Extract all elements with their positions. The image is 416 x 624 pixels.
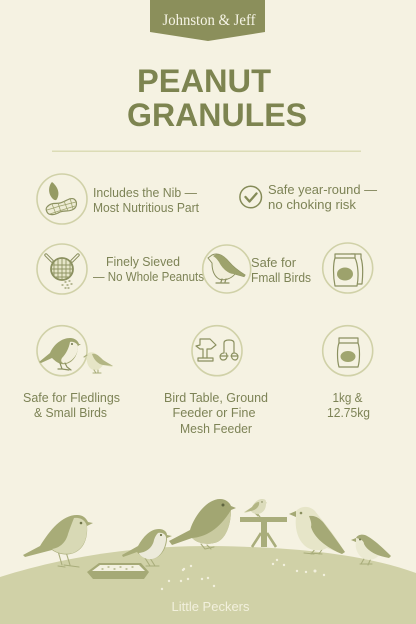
text: pack sizes: 1kg & bbox=[332, 390, 363, 405]
text: feeder types: Feeder or Fine bbox=[172, 405, 256, 420]
text: finely sieved: Finely Sieved bbox=[106, 254, 180, 269]
bird: pale bird facing left bbox=[289, 507, 345, 554]
icon: sieve bbox=[37, 244, 87, 294]
feature: pack sizes bbox=[323, 326, 373, 420]
text: includes the nib: Most Nutritious Part bbox=[93, 200, 199, 215]
title: PEANUT bbox=[137, 63, 271, 99]
seed tray bbox=[87, 563, 149, 579]
bird: robin left bbox=[23, 515, 93, 567]
bird: small bird right bbox=[351, 535, 391, 565]
title: GRANULES bbox=[127, 97, 307, 133]
text: safe for fledglings: Safe for Fledlings bbox=[23, 390, 120, 405]
text: includes the nib: Includes the Nib — bbox=[93, 185, 197, 200]
icon: adult bird and fledgling bbox=[37, 326, 113, 376]
icon: bird bbox=[203, 245, 251, 293]
brand banner bbox=[150, 0, 265, 41]
text: safe for fledglings bbox=[23, 390, 120, 420]
text: safe for small birds bbox=[251, 255, 311, 285]
bird: small finch at tray bbox=[122, 529, 172, 566]
garden scene with birds bbox=[0, 499, 416, 624]
scattered seeds bbox=[161, 559, 325, 590]
brand banner: Johnston & Jeff bbox=[162, 12, 256, 29]
icon: bag bbox=[323, 326, 373, 376]
footer brand text: Little Peckers bbox=[172, 600, 250, 614]
text: feeder types: Bird Table, Ground bbox=[164, 390, 268, 405]
bird table with small bird bbox=[240, 499, 287, 547]
feature: includes the nib bbox=[37, 174, 199, 224]
feature: safe for fledglings bbox=[23, 326, 120, 420]
text: pack sizes bbox=[327, 390, 370, 420]
text: safe year-round: no choking risk bbox=[268, 197, 357, 212]
hill bbox=[0, 546, 416, 624]
icon: check mark bbox=[240, 186, 262, 208]
icon: bird table and feeders bbox=[192, 326, 242, 376]
text: includes the nib bbox=[93, 185, 199, 215]
text: safe for small birds: Fmall Birds bbox=[251, 270, 311, 285]
icon: peanut and leaf bbox=[37, 174, 87, 224]
text: safe year-round: Safe year-round — bbox=[268, 182, 377, 197]
icon: two bags bbox=[323, 243, 373, 293]
text: feeder types bbox=[164, 390, 268, 436]
text: feeder types: Mesh Feeder bbox=[180, 421, 253, 436]
text: safe for fledglings: & Small Birds bbox=[34, 405, 107, 420]
text: finely sieved bbox=[93, 254, 204, 284]
text: finely sieved: — No Whole Peanuts bbox=[93, 269, 204, 284]
text: safe year-round bbox=[268, 182, 377, 212]
feature: feeder types bbox=[164, 326, 268, 436]
text: pack sizes: 12.75kg bbox=[327, 405, 370, 420]
title bbox=[127, 63, 307, 133]
text: safe for small birds: Safe for bbox=[251, 255, 297, 270]
feature: finely sieved bbox=[37, 244, 204, 294]
feature: safe year-round bbox=[240, 182, 377, 212]
bird: centre bird pecking right bbox=[169, 499, 236, 549]
feature: safe for small birds bbox=[203, 245, 311, 293]
